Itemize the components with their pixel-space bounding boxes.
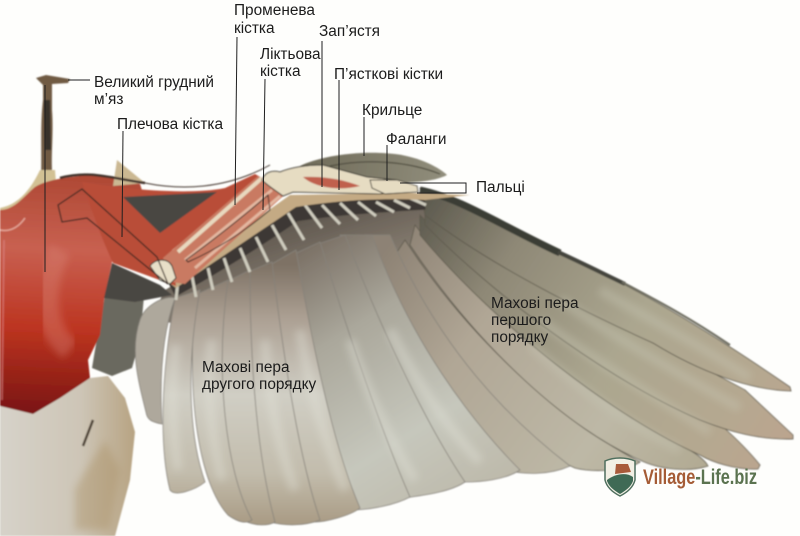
label: metacarpals: П’ясткові кістки <box>334 66 443 83</box>
shoulder ridge <box>113 160 145 186</box>
metacarpal gap <box>303 177 360 188</box>
alula feathers <box>300 153 447 183</box>
forearm muscles <box>163 176 290 284</box>
underarm shadow gap <box>123 192 217 233</box>
upper edge line <box>60 175 145 183</box>
label: ulna: кістка <box>260 63 301 80</box>
label: pectoral muscle: м’яз <box>94 91 123 108</box>
hand bones <box>262 165 413 196</box>
label: fingers: Пальці <box>476 179 525 196</box>
tan covert band <box>168 193 470 288</box>
outer primary feathers <box>395 188 793 470</box>
primary highlights <box>530 290 750 450</box>
icon: shield <box>605 458 635 496</box>
label: radius: Променева <box>234 2 315 19</box>
lower shoulder shadow <box>104 263 172 302</box>
ulna outline <box>186 195 270 262</box>
humerus outline <box>58 189 168 284</box>
covert feathers under the shoulder <box>92 285 145 376</box>
leader lines <box>45 37 466 272</box>
upper arm muscles <box>82 174 262 286</box>
label: primary flight feathers: першого <box>491 312 551 329</box>
label: radius: кістка <box>234 20 275 37</box>
breast muscle <box>0 175 150 414</box>
belly feathers <box>0 376 135 536</box>
label: primary flight feathers: порядку <box>491 329 549 346</box>
secondary highlights <box>172 330 480 490</box>
thin upper arm edge <box>145 165 270 187</box>
logo <box>605 458 757 496</box>
label: phalanges: Фаланги <box>386 131 447 148</box>
inner primary and secondary feathers <box>135 235 570 525</box>
label: pectoral muscle: Великий грудний <box>94 74 214 91</box>
wordmark: Village-Life.biz <box>643 466 757 489</box>
label: humerus: Плечова кістка <box>117 116 223 133</box>
dark gaps and quill bases along the arm <box>172 198 426 300</box>
neck stub <box>0 75 70 216</box>
feather base underlay <box>150 198 540 350</box>
digit bones <box>370 180 418 194</box>
label: primary flight feathers: Махові пера <box>491 295 579 312</box>
label: alula: Крильце <box>362 102 422 119</box>
label: ulna: Ліктьова <box>260 46 321 63</box>
label: secondary flight feathers: Махові пера <box>202 359 290 376</box>
dark leading edge of wing <box>420 190 730 345</box>
label: secondary flight feathers: другого порядку <box>202 376 317 393</box>
elbow bones <box>150 260 176 284</box>
label: wrist: Зап’ястя <box>319 23 380 40</box>
